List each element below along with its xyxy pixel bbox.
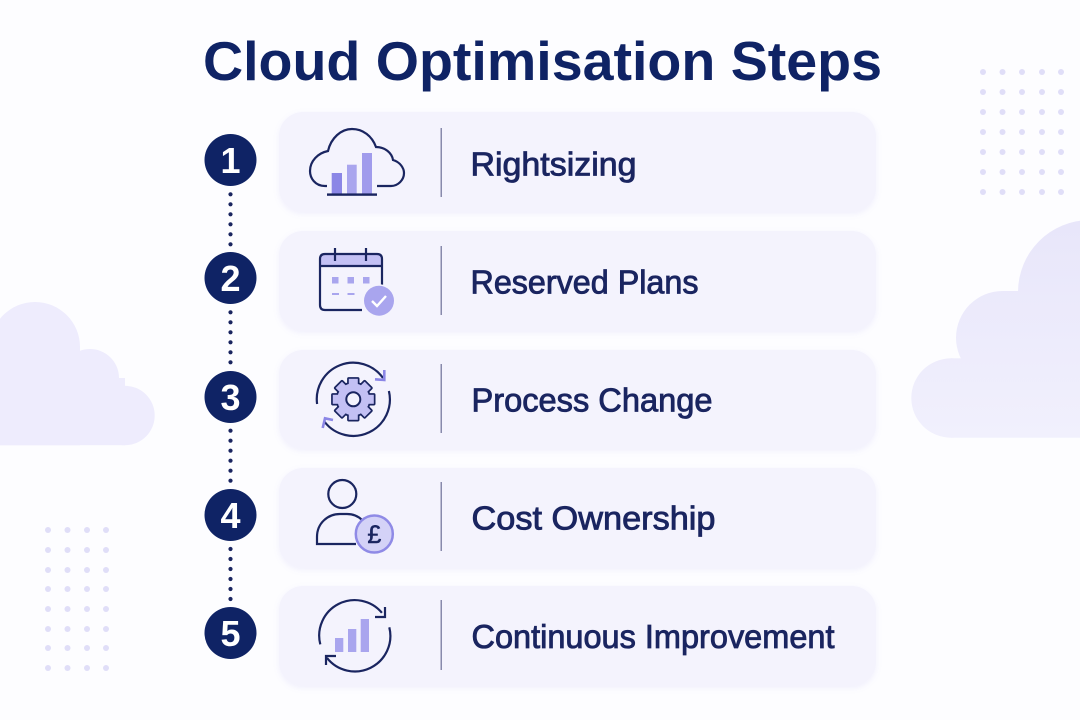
- number badge 4: 4: [220, 495, 241, 536]
- divider 3: [441, 364, 442, 433]
- number badge 4: [204, 489, 256, 541]
- icon: person with pound coin: £: [367, 521, 381, 549]
- label: Continuous Improvement: Continuous Improvement: [472, 618, 834, 655]
- label: Cost Ownership: Cost Ownership: [472, 500, 716, 536]
- number badge 1: [204, 134, 256, 186]
- icon: gear with cycle arrows: [317, 363, 390, 436]
- dot grid: top right: [980, 69, 1064, 195]
- step 1: rightsizing: [204, 112, 876, 212]
- dot grid: bottom left: [45, 527, 109, 671]
- decorative cloud: right: [911, 220, 1080, 438]
- connector: dotted timeline: [228, 192, 233, 601]
- title: Cloud Optimisation Steps: [203, 30, 882, 92]
- number badge 1: 1: [220, 140, 241, 181]
- divider 1: [441, 128, 442, 197]
- icon: calendar with check: [320, 248, 396, 317]
- divider 2: [441, 246, 442, 315]
- step 5: continuous improvement: [204, 586, 876, 686]
- label: Reserved Plans: Reserved Plans: [470, 264, 698, 300]
- label: Rightsizing: Rightsizing: [470, 146, 636, 182]
- step 3: process change: [204, 350, 876, 449]
- step 2: reserved plans: [204, 231, 876, 331]
- icon: person with pound coin: [317, 480, 393, 552]
- number badge 2: 2: [220, 258, 241, 299]
- card 3 background: [279, 350, 876, 449]
- step 4: cost ownership: [204, 468, 876, 568]
- card 1 background: [279, 112, 876, 212]
- card 4 background: [279, 468, 876, 568]
- decorative cloud: left: [0, 302, 155, 445]
- label: Process Change: Process Change: [472, 382, 712, 418]
- divider 4: [441, 482, 442, 551]
- card 5 background: [279, 586, 876, 686]
- number badge 3: 3: [220, 377, 241, 418]
- number badge 3: [204, 371, 256, 423]
- icon: cloud with bar chart: [310, 129, 404, 196]
- divider 5: [441, 600, 442, 670]
- number badge 5: 5: [220, 613, 241, 654]
- card 2 background: [279, 231, 876, 331]
- number badge 2: [204, 252, 256, 304]
- number badge 5: [204, 607, 256, 659]
- icon: cycle arrows with bars: [319, 600, 390, 671]
